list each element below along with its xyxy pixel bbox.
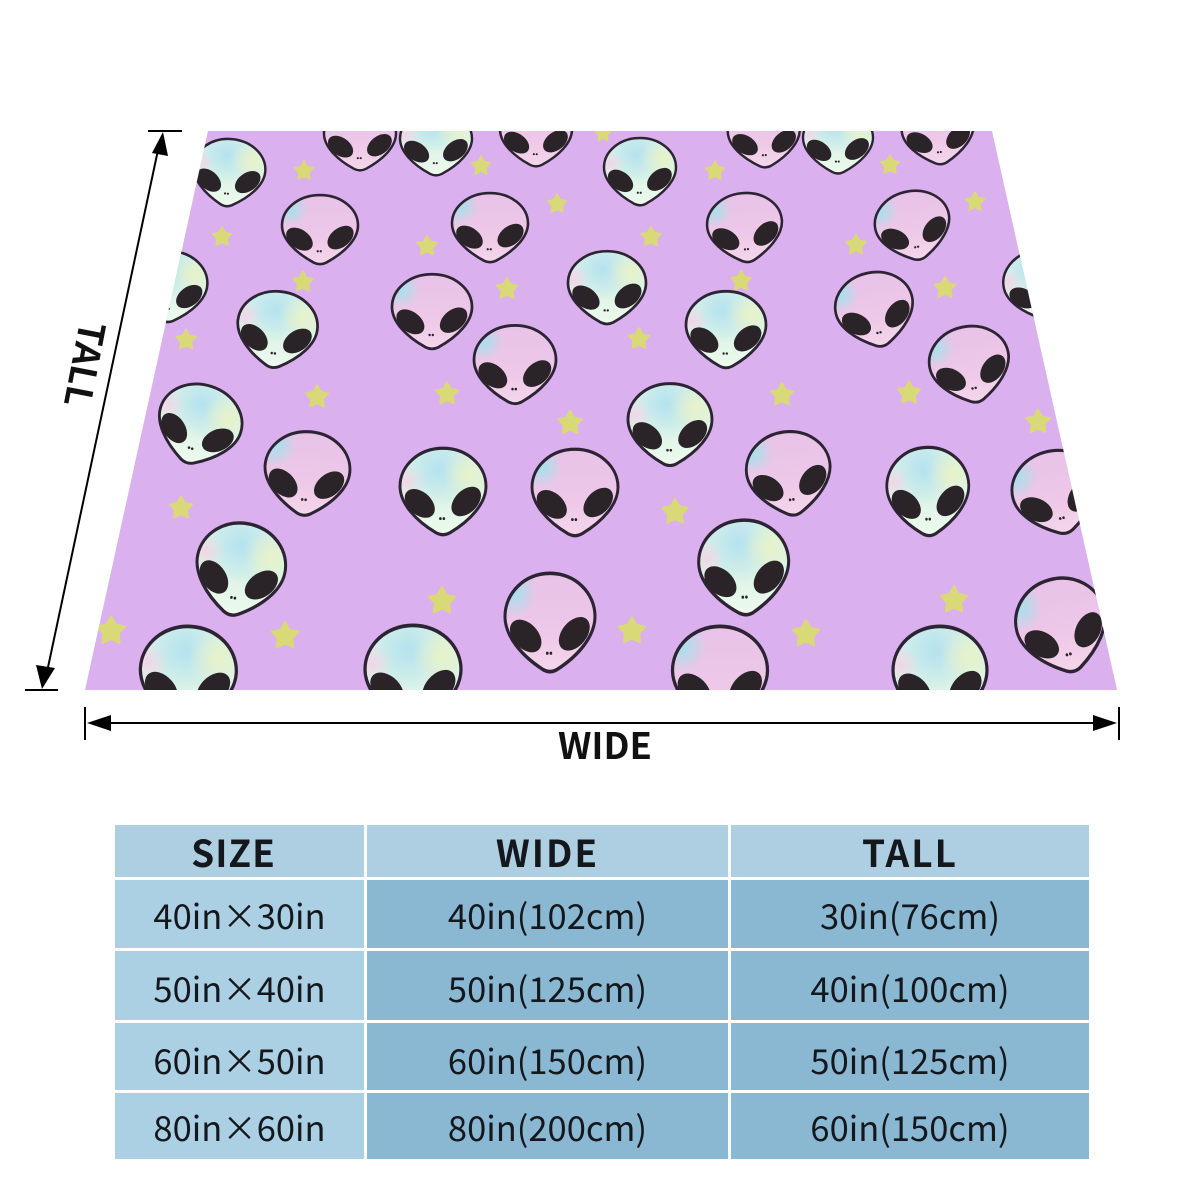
row 1 wide: 40in(102cm)	[448, 889, 647, 939]
header: size	[115, 825, 364, 877]
row 4 size	[115, 1093, 364, 1159]
row 3 tall	[731, 1023, 1089, 1090]
star pattern	[97, 126, 1050, 647]
row 2 tall	[731, 951, 1089, 1020]
row 1 tall	[731, 880, 1089, 948]
header: wide	[367, 825, 728, 877]
blanket fabric	[80, 128, 1120, 693]
row 4 tall	[731, 1093, 1089, 1159]
row 1 size	[115, 880, 364, 948]
row 4 wide	[367, 1093, 728, 1159]
row 3 wide: 60in(150cm)	[448, 1034, 647, 1084]
row 2 tall: 40in(100cm)	[810, 962, 1010, 1012]
row 3 wide	[367, 1023, 728, 1090]
row 2 wide	[367, 951, 728, 1020]
row 2 size: 50in×40in	[153, 962, 326, 1012]
header: wide: WIDE	[496, 824, 599, 878]
row 1 wide	[367, 880, 728, 948]
row 1 tall: 30in(76cm)	[820, 889, 1000, 939]
alien face pattern	[130, 95, 1118, 729]
panel: blanket	[85, 131, 1117, 690]
row 4 wide: 80in(200cm)	[448, 1101, 647, 1151]
row 3 size	[115, 1023, 364, 1090]
row 1 size: 40in×30in	[153, 889, 326, 939]
blanket illustration with dimension arrows	[25, 130, 1120, 759]
header: tall: TALL	[862, 824, 958, 878]
row 2 size	[115, 951, 364, 1020]
arrow: wide dimension	[85, 707, 1119, 740]
size table	[115, 824, 1089, 1159]
row 3 tall: 50in(125cm)	[810, 1034, 1010, 1084]
header: tall	[731, 825, 1089, 877]
header: size: SIZE	[191, 824, 276, 878]
row 2 wide: 50in(125cm)	[448, 962, 647, 1012]
label: TALL: TALL	[53, 318, 120, 412]
arrow: tall dimension	[25, 131, 182, 690]
row 3 size: 60in×50in	[153, 1034, 326, 1084]
row 4 size: 80in×60in	[153, 1101, 326, 1151]
row 4 tall: 60in(150cm)	[810, 1101, 1010, 1151]
label: WIDE: WIDE	[558, 717, 652, 770]
